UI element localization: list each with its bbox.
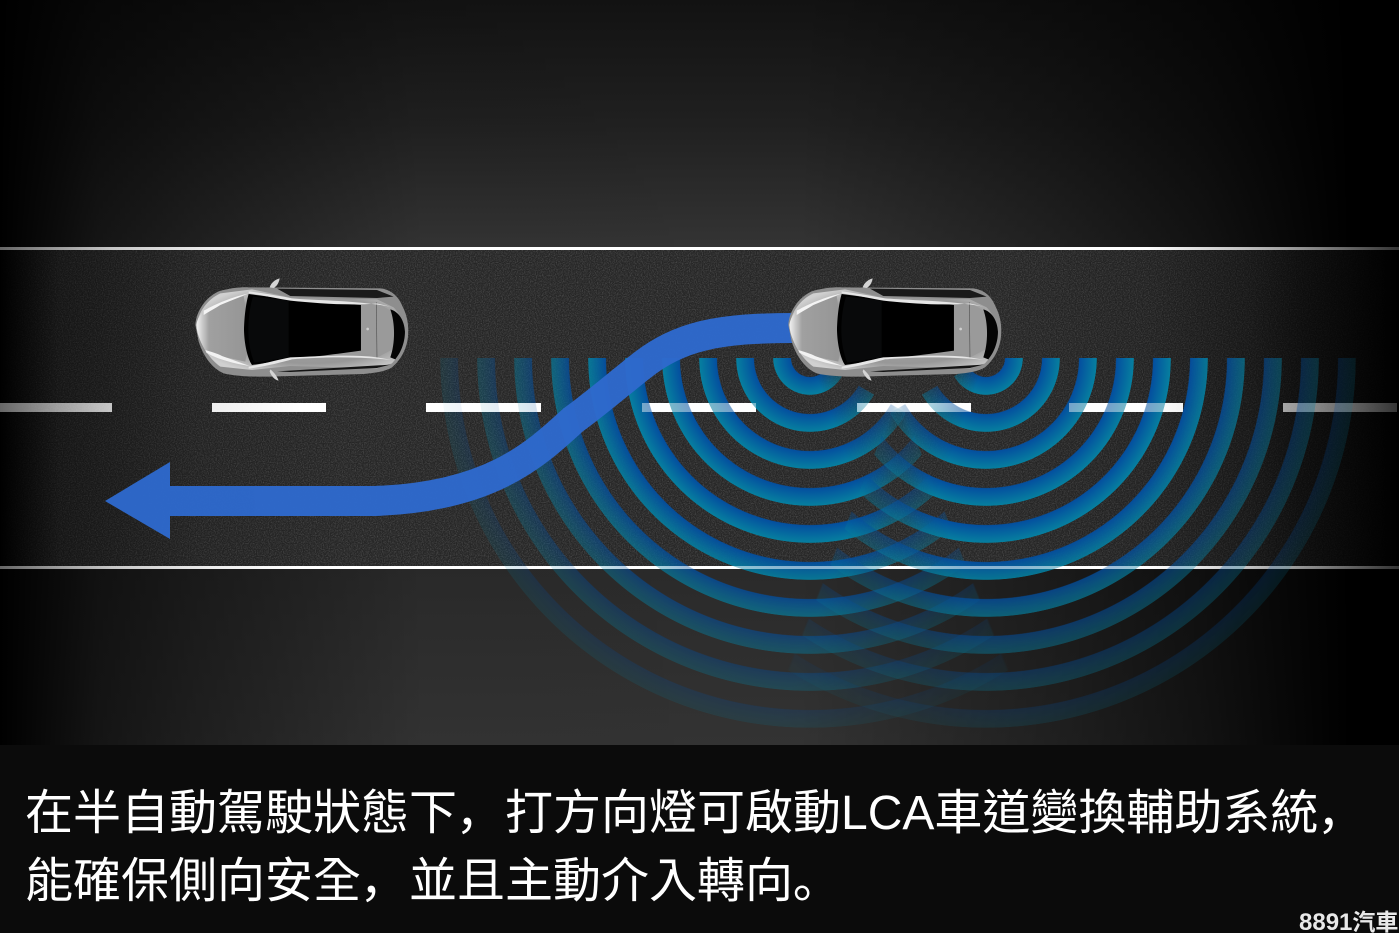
lower shoulder vignette <box>0 568 1399 746</box>
top road edge line <box>0 247 1399 250</box>
car changing lanes <box>788 278 1001 381</box>
caption panel <box>0 745 1399 933</box>
bottom road edge line <box>0 566 1399 569</box>
lower shoulder <box>0 568 1399 746</box>
lane dashes <box>0 403 1397 412</box>
asphalt road surface <box>0 248 1399 568</box>
blue lane change arrow <box>105 328 795 539</box>
caption line 2: 能確保側向安全， 並且主動介入轉向。 <box>25 855 826 925</box>
sensor waves: right front radar <box>792 358 1356 728</box>
upper shoulder vignette <box>0 0 1399 248</box>
bottom edge line highlight over waves <box>470 566 1270 569</box>
caption line 1: 在半自動駕駛狀態下， 打方向燈可啟動LCA車道變換輔助系統， <box>25 787 1352 857</box>
sensor waves: left rear radar <box>440 358 1006 728</box>
upper shoulder <box>0 0 1399 248</box>
road vignette <box>0 248 1399 568</box>
car in target lane <box>195 278 408 381</box>
lane dash highlights over waves <box>426 403 1183 412</box>
asphalt grain <box>0 250 1399 567</box>
